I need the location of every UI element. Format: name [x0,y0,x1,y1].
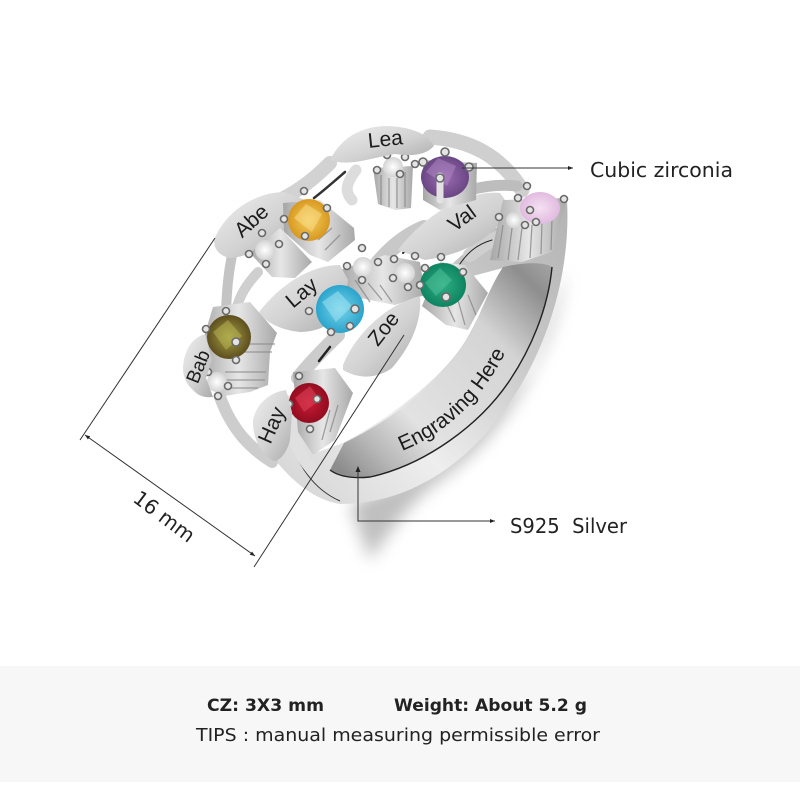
setting: cubic zirconia group, centre [340,244,425,305]
engraved name: Hay: Hay [254,403,290,447]
callout: cubic zirconia: Cubic zirconia [590,158,733,182]
engraved name: Val: Val [444,201,481,237]
ring cast shadow [350,270,566,560]
leaf: Hay [253,390,292,461]
spec: weight: Weight: About 5.2 g [394,696,587,716]
setting: cubic zirconia under Abe [246,228,312,278]
callout: S925 silver [356,466,628,538]
callout: S925 silver: S925 Silver [510,514,628,538]
setting: cubic zirconia under Lea [373,152,418,210]
leaf: Bab [183,334,215,397]
leaf: Abe [214,192,305,258]
setting: purple gem basket and round stone [419,148,477,210]
ring band shank [273,200,567,504]
engraved name: Zoe: Zoe [364,308,404,350]
tips note: TIPS : manual measuring permissible error [195,725,601,746]
engraved name: Abe: Abe [230,200,273,242]
silver strands [220,137,522,470]
footer band [0,666,800,782]
spec: stone size: CZ: 3X3 mm [207,696,324,716]
setting: blue gem [306,285,364,336]
setting: pink gem and cubic zirconia [490,182,568,262]
dimension: 16 mm width [80,238,404,567]
setting: yellow gem [280,188,355,262]
setting: red gem [286,368,353,455]
leaf: Val [398,193,510,260]
white hole inside band [300,268,503,452]
ring illustration [183,126,568,561]
engraved name: Lea: Lea [367,126,404,153]
dimension: 16 mm width: 16 mm [129,486,200,547]
setting: green gem [416,254,488,330]
setting: olive gem and cubic zirconia [200,302,277,400]
band inner engraving face [330,263,552,478]
leaf: Lay [259,265,348,332]
leaf: Zoe [343,296,420,377]
engraved name: Lay: Lay [281,273,323,313]
engraved name: Bab: Bab [183,347,215,387]
engraving text on band: Engraving Here [398,350,504,450]
leaf: Lea [330,126,434,163]
